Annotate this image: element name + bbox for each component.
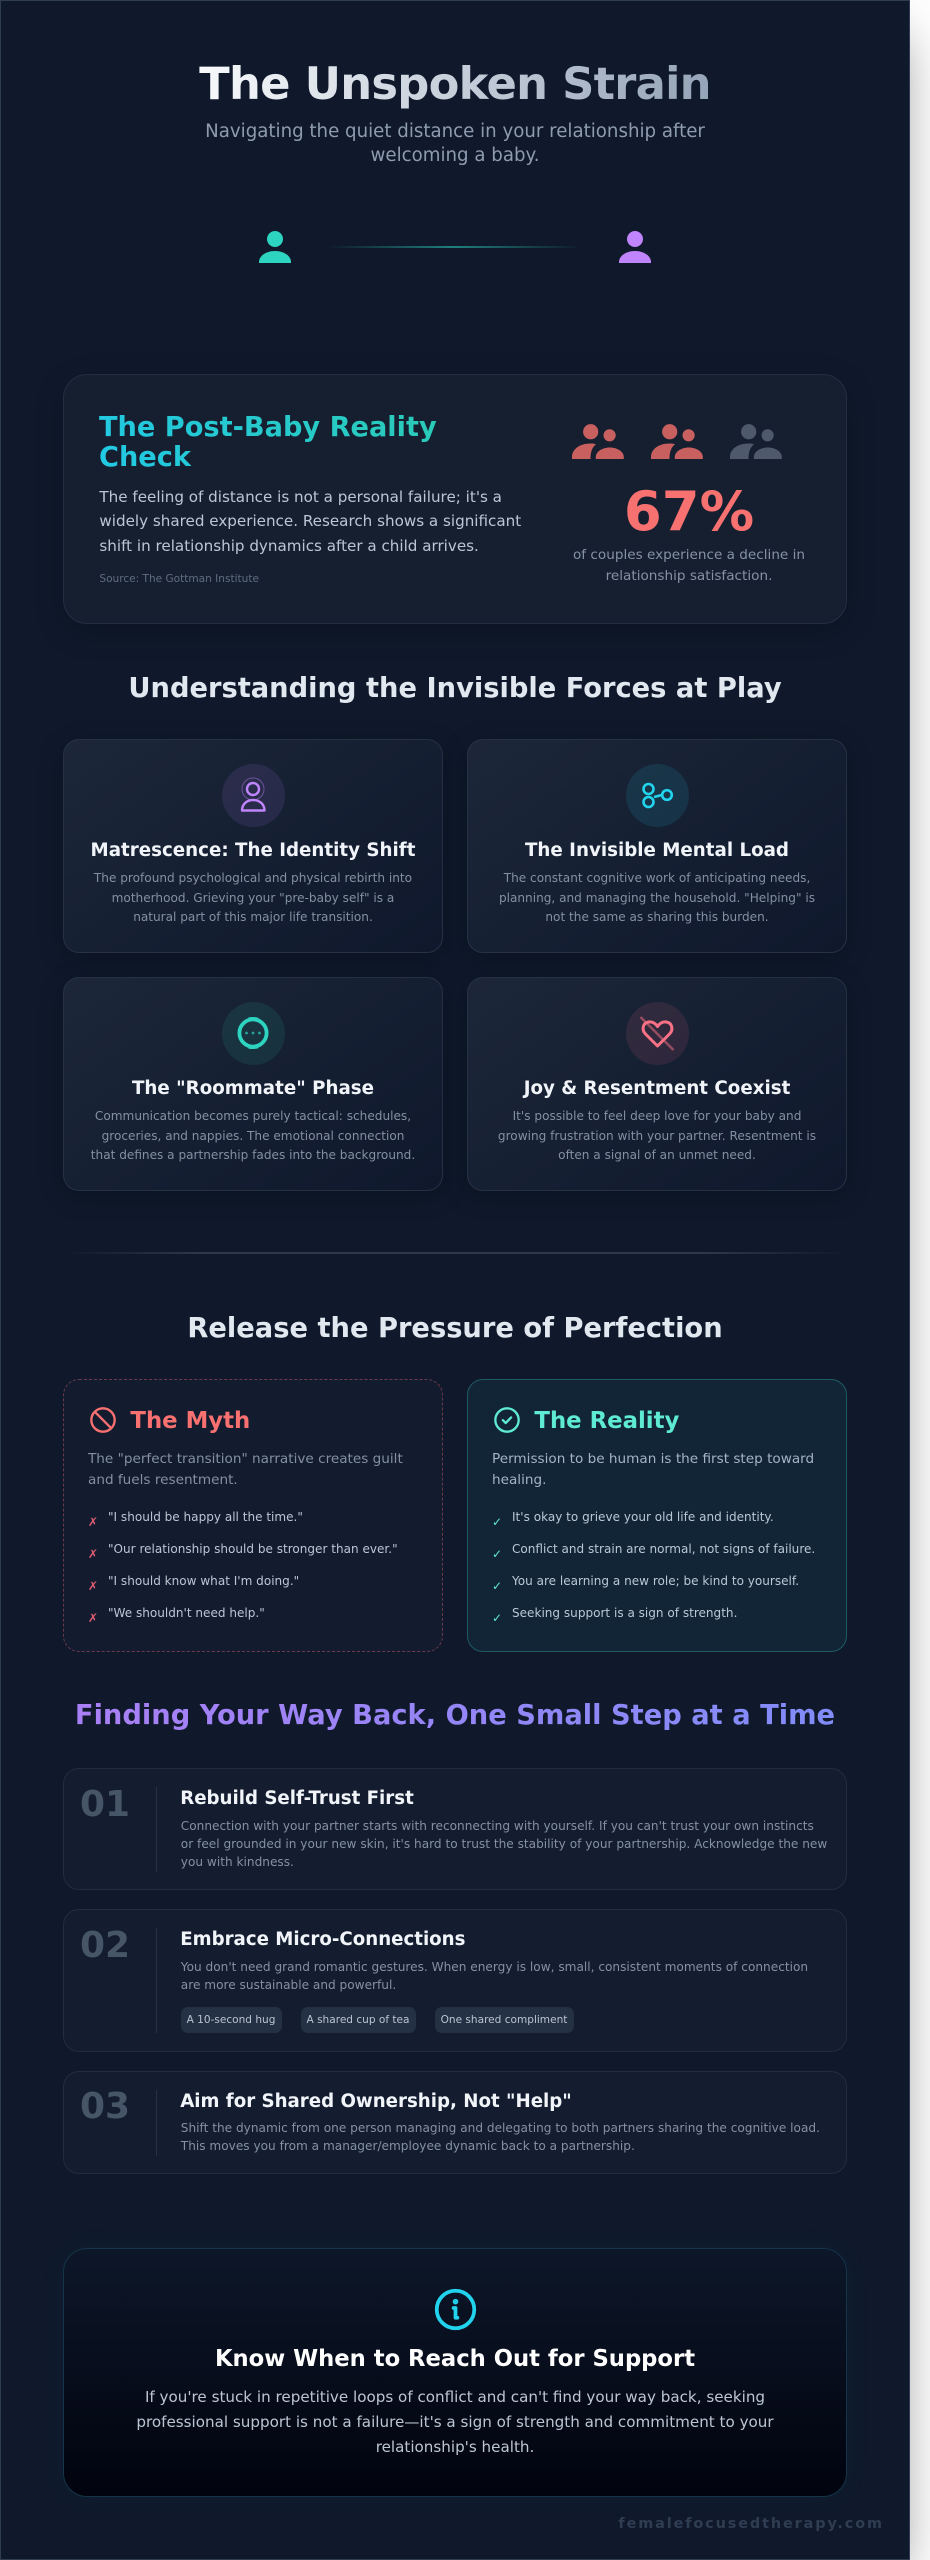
reality item 3: You are learning a new role; be kind to yourself. (512, 1574, 799, 1588)
statistic caption (573, 547, 805, 584)
icon: couple 2 (651, 424, 703, 459)
support text: professional support is not a failure—it's a sign of strength and commitment to your (136, 2413, 774, 2431)
icon: purple partner (619, 231, 651, 263)
myth item 1: "I should be happy all the time." (108, 1510, 303, 1524)
card text: not the same as sharing this burden. (545, 910, 769, 924)
reality item 4: Seeking support is a sign of strength. (512, 1606, 737, 1620)
icon: check circle (494, 1407, 520, 1433)
card text: planning, and managing the household. "Helping" is (499, 891, 815, 905)
step text: This moves you from a manager/employee dynamic back to a partnership. (181, 2139, 635, 2153)
reality text: Permission to be human is the first step toward (492, 1451, 814, 1467)
myth mark 4: ✗ (88, 1611, 98, 1625)
reality heading: The Reality (534, 1408, 679, 1434)
myth text: and fuels resentment. (88, 1472, 238, 1488)
step text (180, 2121, 820, 2153)
icon: info (434, 2288, 476, 2330)
heading: invisible forces: Understanding the Invisible Forces at Play (128, 673, 782, 704)
card text: Communication becomes purely tactical: schedules, (95, 1109, 411, 1123)
body text: shift in relationship dynamics after a child arrives. (99, 537, 479, 555)
statistic 67%: 67% (624, 480, 754, 543)
reality mark 2: ✓ (492, 1547, 502, 1561)
card text: that defines a partnership fades into the background. (91, 1148, 415, 1162)
heading: finding your way back: Finding Your Way Back, One Small Step at a Time (75, 1700, 835, 1731)
heading: Check (99, 442, 191, 473)
support text: relationship's health. (376, 2438, 534, 2456)
card title: Joy & Resentment Coexist (524, 1078, 790, 1099)
panel: mental load (467, 739, 847, 953)
icon: identity (222, 764, 284, 827)
panel: reach out for support (63, 2248, 847, 2497)
card text: often a signal of an unmet need. (558, 1148, 756, 1162)
support text: If you're stuck in repetitive loops of conflict and can't find your way back, seeking (145, 2388, 765, 2406)
reality mark 4: ✓ (492, 1611, 502, 1625)
myth item 4: "We shouldn't need help." (108, 1606, 265, 1620)
pill: hug (180, 2007, 282, 2033)
reality item 2: Conflict and strain are normal, not signs of failure. (512, 1542, 815, 1556)
myth heading: The Myth (130, 1408, 250, 1434)
pill: compliment (434, 2007, 574, 2033)
card text: groceries, and nappies. The emotional connection (102, 1129, 404, 1143)
card text: natural part of this major life transition. (133, 910, 373, 924)
icon: connected nodes (626, 764, 688, 827)
step title: Embrace Micro-Connections (180, 1929, 465, 1950)
card text (498, 1109, 816, 1162)
card text: The profound psychological and physical rebirth into (94, 871, 412, 885)
heading (99, 413, 437, 473)
heading: The Post-Baby Reality (99, 412, 437, 443)
pill: compliment: One shared compliment (441, 2014, 567, 2026)
step text: You don't need grand romantic gestures. When energy is low, small, consistent moments of connection (181, 1960, 808, 1974)
support heading: Know When to Reach Out for Support (215, 2346, 695, 2372)
myth text (88, 1451, 403, 1488)
icon: crossed heart (626, 1002, 688, 1065)
panel: the reality (467, 1379, 847, 1652)
panel: the myth (63, 1379, 443, 1652)
subtitle (205, 121, 705, 166)
panel: post-baby reality check (63, 374, 847, 624)
statistic caption: relationship satisfaction. (606, 568, 772, 584)
step text: Connection with your partner starts with reconnecting with yourself. If you can't trust your own instincts (181, 1819, 814, 1833)
body text: widely shared experience. Research shows a significant (99, 512, 521, 530)
step text: Shift the dynamic from one person managing and delegating to both partners sharing the cognitive load. (181, 2121, 820, 2135)
reality text: healing. (492, 1472, 546, 1488)
subtitle: welcoming a baby. (370, 145, 539, 166)
step number: 03 (80, 2086, 130, 2127)
reality item 1: It's okay to grieve your old life and identity. (512, 1510, 774, 1524)
card text (91, 1109, 415, 1162)
subtitle: Navigating the quiet distance in your relationship after (205, 121, 705, 142)
statistic caption: of couples experience a decline in (573, 547, 805, 563)
reality mark 1: ✓ (492, 1515, 502, 1529)
step title: Aim for Shared Ownership, Not "Help" (180, 2091, 572, 2112)
card title: Matrescence: The Identity Shift (91, 840, 415, 861)
step title: Rebuild Self-Trust First (180, 1788, 414, 1809)
reality text (492, 1451, 814, 1488)
pill: tea: A shared cup of tea (306, 2014, 410, 2026)
myth item 3: "I should know what I'm doing." (108, 1574, 299, 1588)
source: Source: The Gottman Institute (99, 573, 259, 585)
panel: step 03 (63, 2071, 847, 2174)
icon: couple 1 (572, 424, 624, 459)
pill: hug: A 10-second hug (187, 2014, 275, 2026)
reality mark 3: ✓ (492, 1579, 502, 1593)
panel: roommate phase (63, 977, 443, 1191)
body text (99, 488, 521, 555)
body text: The feeling of distance is not a personal failure; it's a (99, 488, 502, 506)
card title: The "Roommate" Phase (132, 1078, 374, 1099)
icon: teal partner (259, 231, 291, 263)
support text (136, 2388, 774, 2456)
step text (181, 1819, 827, 1869)
step text (180, 1960, 808, 1992)
icon: prohibited (90, 1407, 116, 1433)
card text: The constant cognitive work of anticipating needs, (504, 871, 810, 885)
card text: It's possible to feel deep love for your baby and (513, 1109, 801, 1123)
heading: release the pressure: Release the Pressure of Perfection (187, 1313, 723, 1344)
footer website: femalefocusedtherapy.com (618, 2516, 884, 2532)
panel: step 01 (63, 1768, 847, 1890)
card title: The Invisible Mental Load (525, 840, 789, 861)
step text: you with kindness. (181, 1855, 294, 1869)
myth mark 2: ✗ (88, 1547, 98, 1561)
step number: 01 (80, 1784, 130, 1824)
card text (94, 871, 412, 924)
myth mark 1: ✗ (88, 1515, 98, 1529)
myth item 2: "Our relationship should be stronger than ever." (108, 1542, 398, 1556)
card text: motherhood. Grieving your "pre-baby self" is a (112, 891, 394, 905)
step text: are more sustainable and powerful. (181, 1978, 396, 1992)
step text: or feel grounded in your new skin, it's hard to trust the stability of your partnership. Acknowledge the new (181, 1837, 827, 1851)
title: The Unspoken Strain (199, 57, 711, 110)
distance line (327, 246, 581, 248)
panel: matrescence (63, 739, 443, 953)
icon: speech circle (222, 1002, 284, 1065)
myth mark 3: ✗ (88, 1579, 98, 1593)
myth text: The "perfect transition" narrative creates guilt (88, 1451, 403, 1467)
icon: couple 3 (730, 424, 782, 459)
pill: tea (300, 2007, 416, 2033)
step number: 02 (80, 1924, 130, 1966)
card text: growing frustration with your partner. Resentment is (498, 1129, 816, 1143)
panel: joy and resentment (467, 977, 847, 1191)
panel: step 02 (63, 1909, 847, 2052)
card text (499, 871, 815, 924)
